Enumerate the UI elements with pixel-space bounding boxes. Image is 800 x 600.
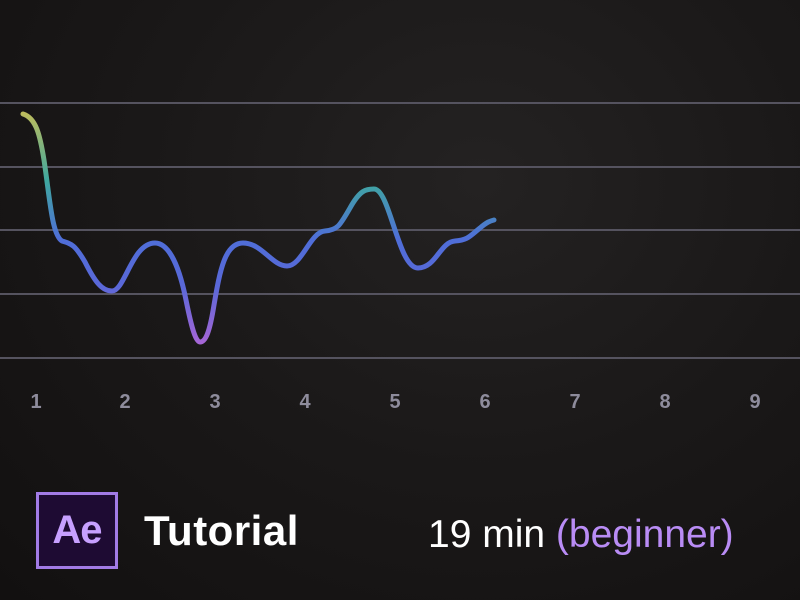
axis labels: 8 xyxy=(659,391,671,413)
axis labels: 1 xyxy=(30,391,42,413)
line curve xyxy=(23,114,494,342)
axis labels: 4 xyxy=(299,391,311,413)
icon: Ae logo: Ae xyxy=(52,508,102,552)
duration text: 19 min (beginner) xyxy=(428,513,734,556)
axis labels: 5 xyxy=(389,391,401,413)
axis labels: 2 xyxy=(119,391,131,413)
axis labels: 3 xyxy=(209,391,221,413)
icon: Ae logo xyxy=(36,492,118,569)
axis labels xyxy=(30,391,761,413)
title: Tutorial xyxy=(144,507,299,554)
axis labels: 6 xyxy=(479,391,491,413)
axis labels: 7 xyxy=(569,391,581,413)
axis labels: 9 xyxy=(749,391,761,413)
